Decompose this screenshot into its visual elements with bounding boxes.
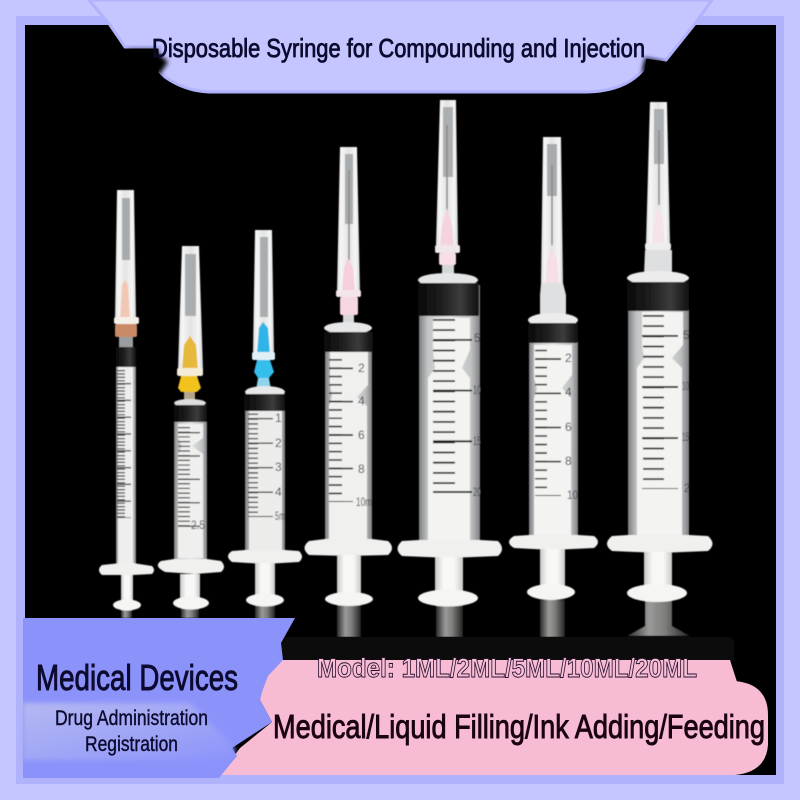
black plunger seal [418,283,479,316]
syringe 7: 20 ml clear hub: 5 [683,328,690,342]
model panel: dark bar and pink strip [264,637,738,685]
syringe 5: 20 ml pink hub [398,100,502,637]
syringe 3: 5 ml blue hub: 1 [275,411,282,425]
registration line 2: Registration [85,733,178,756]
syringe 4: 10 ml pale pink hub: 8 [358,462,365,476]
registration line 1: Drug Administration [55,707,208,730]
model text: Model: 1ML/2ML/5ML/10ML/20ML [317,653,697,683]
needle cap [436,100,458,245]
syringe 5: 20 ml pink hub: 15 [473,434,481,448]
smudges at banner edges [128,50,664,75]
syringe 6: 10 ml pink hub: 10 [567,488,578,502]
black plunger seal [627,282,689,311]
needle cap [253,230,274,353]
syringe 6: 10 ml pink hub: 8 [565,454,572,468]
syringe 3: 5 ml blue hub: 5m [275,509,285,523]
syringe 3: 5 ml blue hub: 2 [275,436,282,450]
black plunger seal [324,332,373,352]
syringe 7: 20 ml clear hub [607,102,712,636]
category heading: Medical Devices [36,657,238,698]
needle cap [646,102,670,243]
syringe 2: 2.5 ml yellow hub: 2.5 [191,518,205,532]
syringe 4: 10 ml pale pink hub: 2 [358,361,365,375]
syringe 7: 20 ml clear hub: 10 [682,379,689,393]
syringe 3: 5 ml blue hub [228,230,302,624]
syringe 5: 20 ml pink hub: 20 [473,485,481,499]
needle cap [115,190,136,318]
syringe 4: 10 ml pale pink hub: 4 [358,394,365,408]
syringe 6: 10 ml pink hub: 4 [565,385,572,399]
needle cap [541,137,563,283]
usage panel [220,681,768,775]
syringe 7: 20 ml clear hub: 2 [684,481,690,495]
needle cap [178,246,203,370]
title banner [89,0,712,92]
syringe 5: 20 ml pink hub: 5 [474,331,481,345]
registration gradient block [23,703,236,760]
needle cap [337,147,360,292]
syringe 5: 20 ml pink hub: 10 [473,383,481,397]
black plunger seal [528,323,578,343]
title text: Disposable Syringe for Compounding and Injection [152,33,645,63]
syringe 3: 5 ml blue hub: 4 [275,485,282,499]
syringe 4: 10 ml pale pink hub [304,147,392,637]
syringe 1: 1 ml orange hub [99,190,154,618]
category panel [23,618,295,778]
syringe 6: 10 ml pink hub [509,137,598,637]
syringe 4: 10 ml pale pink hub: 6 [358,428,365,442]
syringe 2: 2.5 ml yellow hub [158,246,224,618]
syringe 6: 10 ml pink hub: 6 [565,420,572,434]
syringe 4: 10 ml pale pink hub: 10m [356,495,372,509]
syringe 3: 5 ml blue hub: 3 [275,460,282,474]
syringe 7: 20 ml clear hub: 15 [682,430,689,444]
syringe 6: 10 ml pink hub: 2 [565,351,572,365]
